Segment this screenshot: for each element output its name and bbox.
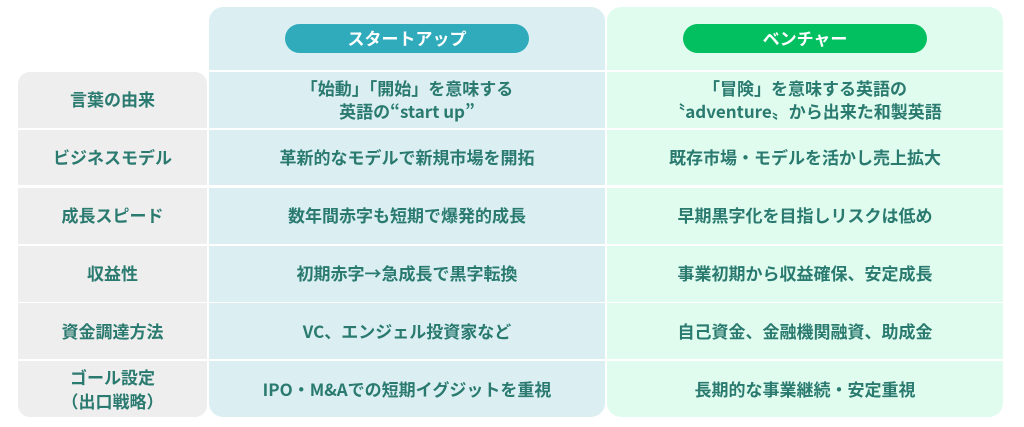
startup: business model: 革新的なモデルで新規市場を開拓	[280, 144, 534, 169]
row label: business model	[18, 130, 207, 185]
venture: funding: 自己資金、金融機関融資、助成金	[678, 318, 932, 343]
startup: growth speed: 数年間赤字も短期で爆発的成長	[288, 202, 526, 227]
row label: goal setting: （出口戦略）	[62, 388, 164, 412]
venture: goal setting	[607, 361, 1003, 417]
venture: profitability	[607, 246, 1003, 302]
header pill: venture	[683, 24, 927, 53]
startup: goal setting: IPO・M&Aでの短期イグジットを重視	[263, 376, 551, 401]
row label: funding: 資金調達方法	[62, 318, 164, 343]
venture: business model: 既存市場・モデルを活かし売上拡大	[669, 144, 941, 169]
venture: funding	[607, 303, 1003, 359]
venture: growth speed: 早期黒字化を目指しリスクは低め	[678, 202, 932, 227]
header pill: venture: ベンチャー	[763, 25, 847, 50]
startup: origin: 「始動」「開始」を意味する	[301, 74, 513, 100]
startup: funding: VC、エンジェル投資家など	[303, 318, 511, 343]
venture: business model	[607, 130, 1003, 185]
venture: origin: 「冒険」を意味する英語の	[703, 74, 907, 100]
row label: origin: 言葉の由来	[70, 86, 155, 111]
startup: funding	[209, 303, 605, 359]
header: venture	[607, 7, 1003, 70]
venture: origin: 〝adventure〟から出来た和製英語	[668, 98, 942, 123]
venture: growth speed	[607, 188, 1003, 244]
row label: business model: ビジネスモデル	[53, 144, 172, 169]
header: startup	[209, 7, 605, 70]
row label: growth speed	[18, 188, 207, 244]
venture: profitability: 事業初期から収益確保、安定成長	[678, 260, 932, 285]
header pill: startup	[285, 24, 529, 53]
row label: growth speed: 成長スピード	[62, 202, 164, 227]
startup: profitability	[209, 246, 605, 302]
row label: profitability: 収益性	[87, 260, 138, 285]
startup: origin	[209, 72, 605, 128]
row label: funding	[18, 303, 207, 359]
startup: business model	[209, 130, 605, 185]
venture: origin	[607, 72, 1003, 128]
startup: profitability: 初期赤字→急成長で黒字転換	[296, 260, 518, 285]
row label: goal setting: ゴール設定	[70, 364, 155, 389]
row label: profitability	[18, 246, 207, 302]
startup: growth speed	[209, 188, 605, 244]
row label: goal setting	[18, 361, 207, 417]
header pill: startup: スタートアップ	[348, 25, 466, 50]
venture: goal setting: 長期的な事業継続・安定重視	[694, 376, 916, 401]
startup: goal setting	[209, 361, 605, 417]
startup: origin: 英語の“start up”	[339, 98, 475, 123]
row label: origin	[18, 72, 207, 128]
